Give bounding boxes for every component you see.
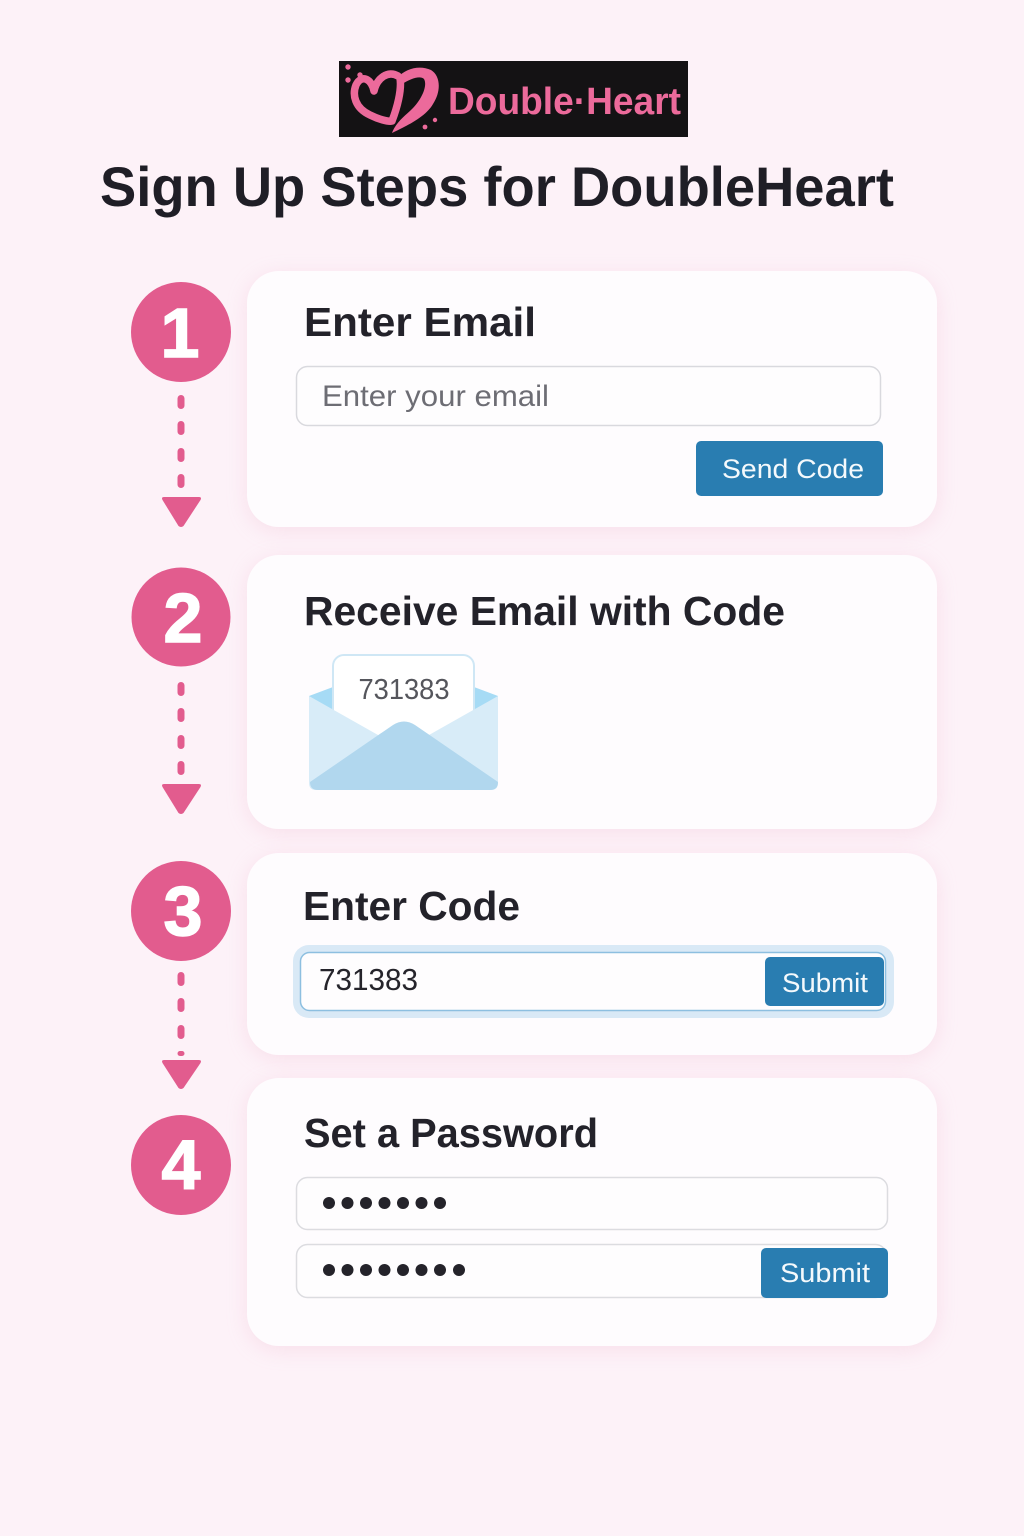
arrow: step 2 to 3 (162, 682, 201, 814)
button: submit: Submit (782, 968, 868, 998)
confirm password input (296, 1244, 888, 1298)
panel: step 1 enter email (247, 271, 937, 527)
email input: Enter your email (322, 380, 549, 413)
code input (293, 945, 894, 1018)
button: send code: Send Code (722, 454, 864, 484)
step badge 1 (131, 282, 231, 382)
button: submit (761, 1248, 888, 1298)
step badge 3 (131, 861, 231, 961)
icon: envelope with code (309, 655, 498, 790)
panel: step 4 set a password (247, 1078, 937, 1346)
step badge 2 (132, 568, 230, 666)
heading: enter code: Enter Code (303, 883, 520, 929)
heading: enter email: Enter Email (304, 299, 536, 345)
button: submit (765, 957, 884, 1006)
step badge 3: 3 (164, 872, 202, 950)
email input (296, 366, 880, 426)
password input (296, 1178, 888, 1230)
heading: set a password: Set a Password (304, 1110, 598, 1156)
heading: receive email with code: Receive Email with Code (304, 588, 785, 634)
code input: 731383 (319, 962, 418, 997)
arrow: step 3 to 4 (162, 972, 201, 1089)
logo (339, 61, 688, 137)
icon: envelope with code: 731383 (358, 674, 450, 706)
button: send code (696, 441, 883, 496)
step badge 4: 4 (162, 1126, 201, 1204)
step badge 1: 1 (161, 294, 199, 372)
panel: step 2 receive email (247, 555, 937, 829)
step badge 4 (131, 1115, 231, 1215)
title: Sign Up Steps for DoubleHeart (100, 155, 894, 218)
step badge 2: 2 (164, 579, 202, 657)
panel: step 3 enter code (247, 853, 937, 1055)
arrow: step 1 to 2 (162, 395, 201, 527)
button: submit: Submit (780, 1258, 871, 1288)
logo: Double·Heart (448, 81, 681, 123)
